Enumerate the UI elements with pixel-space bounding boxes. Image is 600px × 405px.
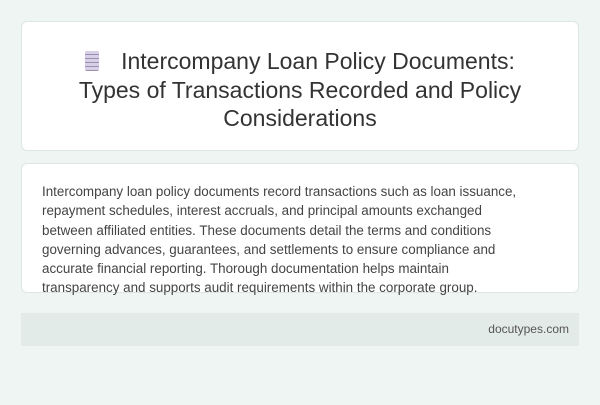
icon: document xyxy=(85,51,99,71)
footer bar xyxy=(21,313,579,346)
footer text: docutypes.com xyxy=(488,322,569,336)
text block: Intercompany loan policy documents record transactions such as loan issuance, xyxy=(42,184,516,199)
title: Considerations xyxy=(223,105,377,131)
text block: repayment schedules, interest accruals, and principal amounts exchanged xyxy=(42,203,482,218)
title: Types of Transactions Recorded and Policy xyxy=(79,76,521,102)
panel: description xyxy=(21,163,579,293)
panel: title card xyxy=(21,21,579,151)
text block xyxy=(42,184,516,295)
text block: governing advances, guarantees, and settlements to ensure compliance and xyxy=(42,242,495,257)
title: Intercompany Loan Policy Documents: xyxy=(121,48,515,74)
text block: transparency and supports audit requirements within the corporate group. xyxy=(42,280,477,295)
text block: between affiliated entities. These documents detail the terms and conditions xyxy=(42,223,491,238)
title xyxy=(79,48,521,131)
text block: accurate financial reporting. Thorough documentation helps maintain xyxy=(42,261,449,276)
